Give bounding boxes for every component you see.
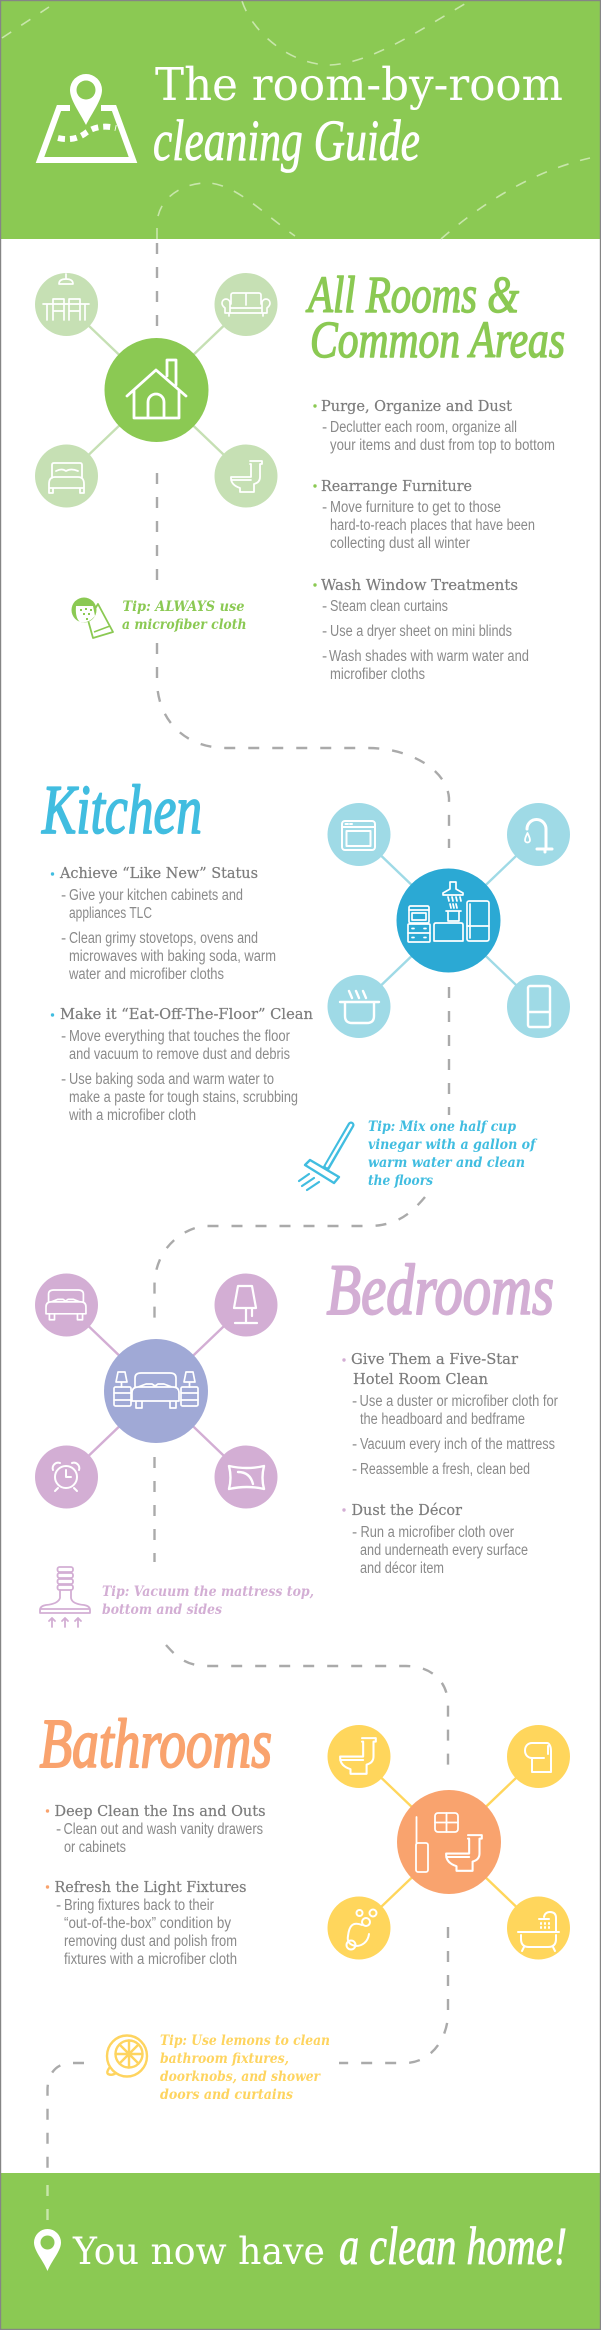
text block: all rooms list: Purge, Organize and Dust	[321, 397, 512, 415]
heading: bathrooms: Bathrooms	[40, 1706, 272, 1783]
tip: all rooms	[122, 599, 246, 633]
text block: bedrooms list: Dust the Décor	[352, 1501, 463, 1519]
tip: bathrooms: bathroom fixtures,	[160, 2051, 289, 2067]
tip: bathrooms: doors and curtains	[160, 2087, 293, 2103]
text block: all rooms list: -	[322, 648, 327, 665]
text block: bedrooms list: -	[352, 1393, 357, 1410]
text block: kitchen list: appliances TLC	[69, 905, 152, 922]
text block: kitchen list: microwaves with baking soda, warm	[69, 948, 276, 965]
icon: microfiber cloth	[72, 598, 113, 638]
icon: bathroom fixtures	[416, 1813, 482, 1872]
text block: all rooms list: your items and dust from top to bottom	[330, 437, 555, 454]
text block: bedrooms list: and décor item	[360, 1560, 444, 1577]
icon: pot	[340, 991, 379, 1023]
text block: all rooms list: Rearrange Furniture	[321, 477, 472, 495]
text block: bedrooms list: and underneath every surface	[360, 1542, 528, 1559]
text block: all rooms list: -	[322, 419, 327, 436]
tip: all rooms: a microfiber cloth	[122, 617, 246, 633]
tip: bathrooms: doorknobs, and shower	[160, 2069, 321, 2085]
text block: kitchen list: Give your kitchen cabinets and	[69, 887, 243, 904]
tip: all rooms: Tip: ALWAYS use	[122, 599, 245, 615]
text block: bedrooms list: Hotel Room Clean	[353, 1370, 488, 1388]
icon: bathtub with shower	[518, 1912, 559, 1951]
text block: all rooms list: collecting dust all winter	[330, 535, 470, 552]
tip: kitchen: vinegar with a gallon of	[368, 1137, 538, 1153]
tip: kitchen: Tip: Mix one half cup	[368, 1119, 516, 1135]
icon: mop	[299, 1125, 351, 1190]
text block: all rooms list: Steam clean curtains	[330, 598, 448, 615]
text block: bathrooms list: Deep Clean the Ins and Outs	[54, 1802, 266, 1820]
icon: pillow	[229, 1466, 264, 1489]
text block: kitchen list: -	[61, 930, 66, 947]
text block: bathrooms list: fixtures with a microfiber cloth	[64, 1951, 237, 1968]
tip: bathrooms: Tip: Use lemons to clean	[160, 2033, 330, 2049]
text block: all rooms list: Use a dryer sheet on mini blinds	[330, 623, 512, 640]
text block: all rooms list: Wash shades with warm water and	[329, 648, 529, 665]
route: dashed path	[48, 243, 449, 2170]
footer band	[0, 2173, 601, 2330]
icon: fridge	[528, 986, 550, 1027]
icon: vacuum head	[40, 1567, 90, 1627]
text block: all rooms list: -	[322, 598, 327, 615]
text block: bedrooms list: Run a microfiber cloth over	[360, 1524, 514, 1541]
text block: all rooms list	[313, 397, 555, 683]
diagram: bathrooms hub	[328, 1725, 570, 1960]
text block: all rooms list: Move furniture to get to those	[330, 499, 501, 516]
text block: bathrooms list: -	[56, 1897, 61, 1914]
panel: kitchen	[41, 772, 570, 1190]
text block: bedrooms list: Reassemble a fresh, clean bed	[360, 1461, 530, 1478]
icon: map with pin	[40, 74, 133, 160]
text block: kitchen list	[51, 864, 313, 1124]
text block: kitchen list: and vacuum to remove dust and debris	[69, 1046, 290, 1063]
title	[153, 58, 563, 173]
icon: toilet paper	[525, 1743, 551, 1772]
icon: bed	[49, 463, 84, 493]
icon: dining table	[43, 274, 89, 320]
text block: bathrooms list: -	[56, 1821, 61, 1838]
icon: faucet	[525, 820, 552, 852]
tip: kitchen	[368, 1119, 538, 1189]
text block: kitchen list: Use baking soda and warm water to	[69, 1071, 274, 1088]
text block: bedrooms list: the headboard and bedframe	[360, 1411, 525, 1428]
text block: bedrooms list: Give Them a Five-Star	[351, 1350, 519, 1368]
icon: house	[127, 360, 186, 418]
icon: sofa	[222, 293, 270, 316]
heading: all rooms	[306, 267, 565, 369]
text block: bedrooms list: -	[352, 1524, 357, 1541]
icon: oven	[342, 821, 375, 850]
text block: bedrooms list: -	[352, 1461, 357, 1478]
text block: kitchen list: water and microfiber cloths	[68, 966, 224, 983]
text block: kitchen list: -	[61, 887, 66, 904]
tip: kitchen: the floors	[368, 1173, 433, 1189]
icon: location pin	[34, 2229, 61, 2271]
text block: all rooms list: Wash Window Treatments	[321, 576, 518, 594]
icon: bed and nightstands	[114, 1372, 198, 1408]
panel: all rooms	[35, 267, 565, 683]
text block: bathrooms list: Clean out and wash vanity drawers	[64, 1821, 263, 1838]
text block: kitchen list: Move everything that touches the floor	[69, 1028, 290, 1045]
text block: all rooms list: microfiber cloths	[330, 666, 425, 683]
text block: kitchen list: Clean grimy stovetops, ovens and	[69, 930, 258, 947]
closing line: You now have	[72, 2230, 325, 2273]
text block: bathrooms list: removing dust and polish from	[64, 1933, 237, 1950]
text block: kitchen list: make a paste for tough stains, scrubbing	[69, 1089, 298, 1106]
text block: bedrooms list: Use a duster or microfiber cloth for	[360, 1393, 558, 1410]
text block: all rooms list: -	[322, 499, 327, 516]
icon: soap and bubbles	[346, 1910, 376, 1950]
icon: kitchen appliances	[408, 882, 489, 942]
text block: bedrooms list	[342, 1350, 558, 1577]
tip: bedrooms: Tip: Vacuum the mattress top,	[102, 1584, 314, 1600]
text block: bathrooms list: Refresh the Light Fixtures	[54, 1878, 246, 1896]
panel: bedrooms	[35, 1250, 558, 1627]
text block: bathrooms list: or cabinets	[64, 1839, 126, 1856]
tip: bedrooms	[102, 1584, 314, 1618]
closing line	[72, 2216, 567, 2276]
icon: lemon	[107, 2036, 147, 2076]
text block: all rooms list: Declutter each room, organize all	[330, 419, 517, 436]
heading: all rooms: All Rooms &	[306, 267, 519, 324]
icon: alarm clock	[53, 1463, 79, 1491]
icon: bed front	[46, 1290, 86, 1320]
text block: bedrooms list: Vacuum every inch of the mattress	[360, 1436, 555, 1453]
text block: bedrooms list: -	[352, 1436, 357, 1453]
icon: toilet	[231, 461, 262, 492]
icon: toilet	[340, 1738, 376, 1774]
tip: kitchen: warm water and clean	[368, 1155, 525, 1171]
text block: all rooms list: -	[322, 623, 327, 640]
heading: kitchen: Kitchen	[41, 772, 202, 849]
diagram: bedrooms hub	[35, 1274, 278, 1508]
title: The room-by-room	[155, 58, 563, 111]
tip: bathrooms	[160, 2033, 330, 2103]
diagram: kitchen hub	[328, 803, 570, 1038]
panel: bathrooms	[40, 1706, 570, 2103]
title: cleaning Guide	[153, 108, 420, 173]
tip: bedrooms: bottom and sides	[102, 1602, 222, 1618]
text block: kitchen list: Make it “Eat-Off-The-Floor” Clean	[60, 1005, 313, 1023]
text block: kitchen list: Achieve “Like New” Status	[59, 864, 258, 882]
text block: bathrooms list: Bring fixtures back to their	[64, 1897, 214, 1914]
text block: bathrooms list	[46, 1802, 265, 1968]
text block: kitchen list: -	[61, 1028, 66, 1045]
text block: all rooms list: hard-to-reach places that have been	[330, 517, 535, 534]
text block: bathrooms list: “out-of-the-box” condition by	[64, 1915, 231, 1932]
text block: kitchen list: -	[61, 1071, 66, 1088]
header band	[0, 0, 601, 239]
icon: table lamp	[234, 1286, 257, 1323]
text block: kitchen list: with a microfiber cloth	[68, 1107, 196, 1124]
diagram: all rooms hub	[35, 273, 278, 508]
